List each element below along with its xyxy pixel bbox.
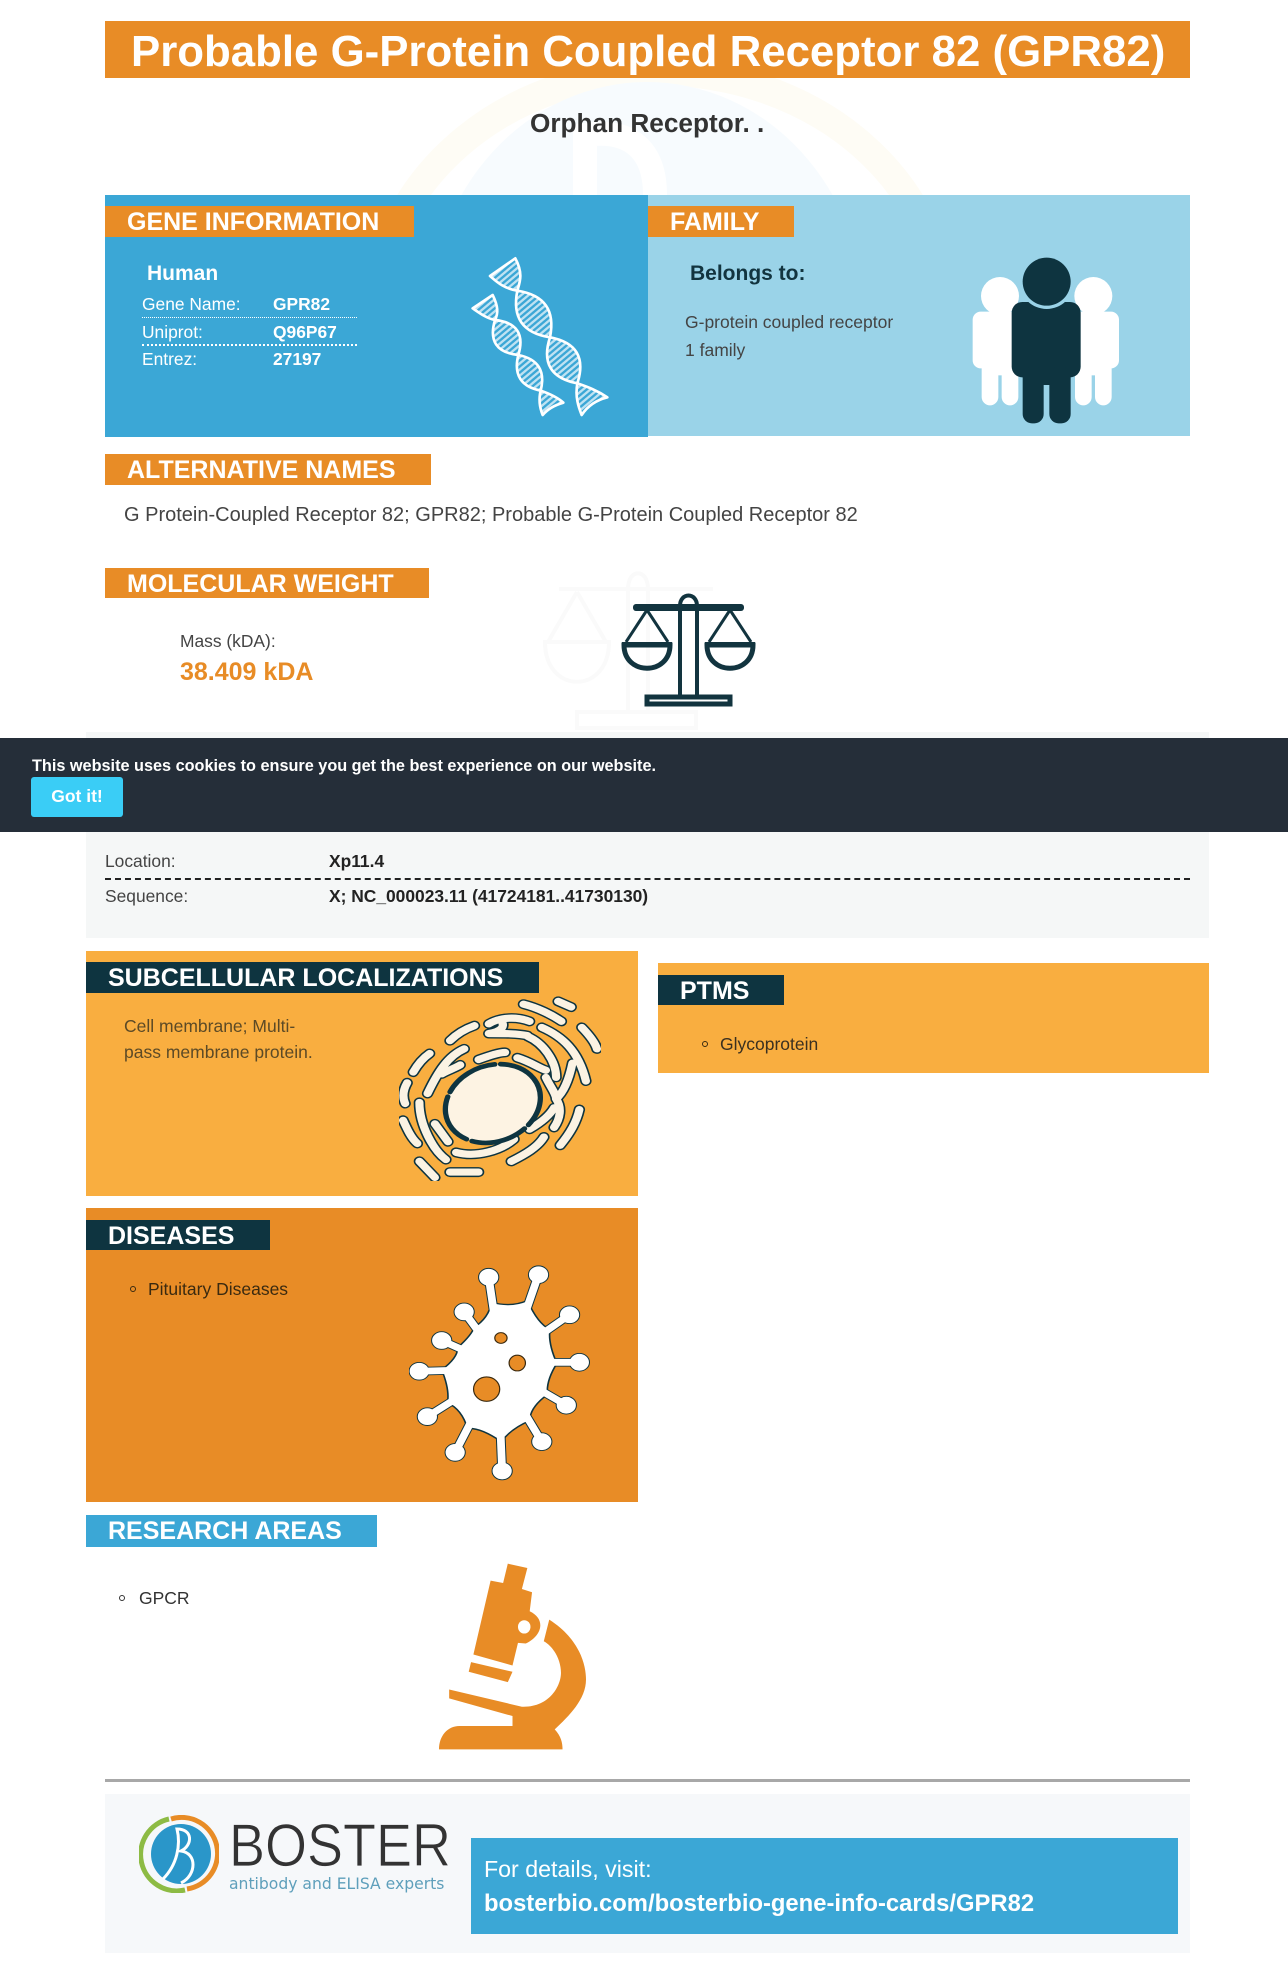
button: got it: Got it! xyxy=(51,786,103,806)
mass value: 38.409 kDA xyxy=(180,658,313,686)
logo mark xyxy=(139,1815,219,1893)
heading: family: FAMILY xyxy=(670,208,759,236)
gene data table: GPR82 xyxy=(273,294,330,314)
heading: subcellular localizations: SUBCELLULAR LOCALIZATIONS xyxy=(108,964,503,992)
gene data table: Q96P67 xyxy=(273,322,337,342)
belongs to label: Belongs to: xyxy=(690,262,806,285)
heading: molecular weight: MOLECULAR WEIGHT xyxy=(127,570,394,598)
panel: family xyxy=(648,195,1190,436)
icon: scale xyxy=(622,594,756,706)
panel: gene information xyxy=(105,195,648,437)
gene data table: Uniprot: xyxy=(142,322,203,342)
heading: research areas: RESEARCH AREAS xyxy=(108,1517,342,1545)
divider line xyxy=(105,1779,1190,1782)
localization text: Cell membrane; Multi- xyxy=(124,1016,295,1036)
heading: ptms xyxy=(658,975,784,1005)
localization text xyxy=(124,1016,313,1062)
heading: gene information: GENE INFORMATION xyxy=(127,208,379,236)
visit text: For details, visit: xyxy=(484,1856,652,1882)
sequence row: Sequence: xyxy=(105,886,188,906)
watermark: scale xyxy=(540,570,720,732)
cookie banner xyxy=(0,738,1288,832)
icon: virus xyxy=(409,1265,590,1480)
panel: ptms xyxy=(658,963,1209,1073)
heading: diseases: DISEASES xyxy=(108,1222,234,1250)
logo tagline: antibody and ELISA experts xyxy=(229,1875,444,1893)
gene data table: Gene Name: xyxy=(142,294,241,314)
heading: alternative names: ALTERNATIVE NAMES xyxy=(127,456,396,484)
family description: G-protein coupled receptor xyxy=(685,312,893,332)
ptms list item: Glycoprotein xyxy=(720,1034,818,1054)
panel: subcellular localizations xyxy=(86,951,638,1196)
localization text: pass membrane protein. xyxy=(124,1042,313,1062)
heading: ptms: PTMS xyxy=(680,977,749,1005)
button: got it xyxy=(31,777,123,817)
callout: details link xyxy=(471,1838,1178,1934)
panel: chromosome location xyxy=(86,732,1209,938)
cookie message: This website uses cookies to ensure you get the best experience on our website. xyxy=(32,757,656,775)
icon: cell xyxy=(399,996,601,1181)
mass label: Mass (kDA): xyxy=(180,631,276,651)
diseases list item: Pituitary Diseases xyxy=(148,1279,288,1299)
subtitle: Orphan Receptor. . xyxy=(530,108,764,138)
family description: 1 family xyxy=(685,340,745,360)
location row xyxy=(105,851,384,871)
sequence row: X; NC_000023.11 (41724181..41730130) xyxy=(329,886,648,906)
alternative names text: G Protein-Coupled Receptor 82; GPR82; Probable G-Protein Coupled Receptor 82 xyxy=(124,504,858,526)
research list item: GPCR xyxy=(139,1588,190,1608)
gene data table: 27197 xyxy=(273,349,321,369)
sequence row xyxy=(105,886,648,906)
title: Probable G-Protein Coupled Receptor 82 (GPR82) xyxy=(131,27,1165,76)
panel: footer xyxy=(105,1794,1190,1953)
location row: Xp11.4 xyxy=(329,851,384,871)
location row: Location: xyxy=(105,851,176,871)
family description xyxy=(685,312,893,360)
url: bosterbio.com/bosterbio-gene-info-cards/GPR82 xyxy=(484,1890,1034,1917)
gene data table: Entrez: xyxy=(142,349,197,369)
panel: diseases xyxy=(86,1208,638,1502)
logo wordmark: BOSTER xyxy=(229,1812,451,1879)
background watermark xyxy=(398,78,922,195)
icon: microscope xyxy=(439,1564,586,1750)
icon: dna helix xyxy=(471,256,609,416)
gene data table xyxy=(142,294,357,369)
heading: diseases xyxy=(86,1220,270,1250)
species label: Human xyxy=(147,262,218,285)
icon: people xyxy=(972,258,1119,424)
logo: boster xyxy=(139,1812,451,1893)
heading: family xyxy=(648,206,794,237)
